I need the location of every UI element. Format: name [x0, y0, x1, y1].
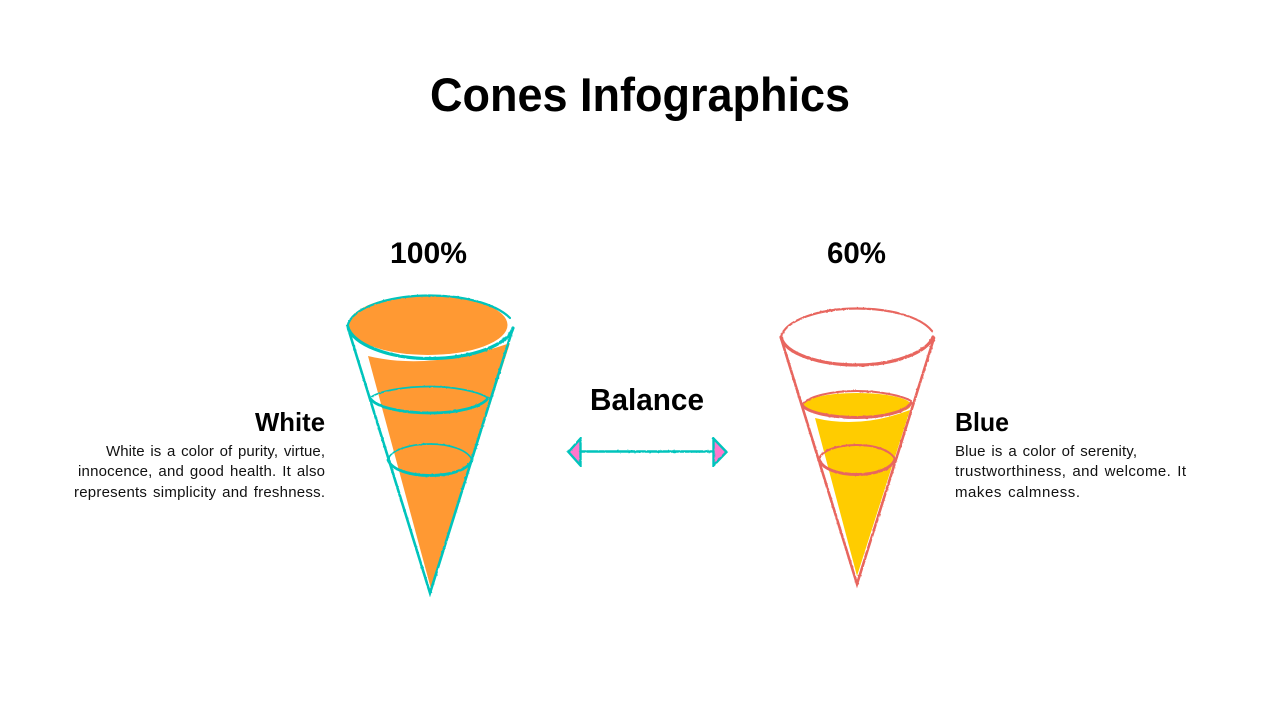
label: Blue: Blue	[955, 407, 1009, 437]
description: White: White is a color of purity, virtue,	[106, 443, 325, 460]
cone fill: yellow top surface	[803, 393, 911, 417]
description: Blue: trustworthiness, and welcome. It	[955, 463, 1187, 480]
cone outline: coral	[781, 308, 934, 584]
panel: blue cone	[781, 237, 1187, 584]
panel: balance arrow	[568, 382, 726, 466]
percentage: 60%: 60%	[827, 237, 886, 270]
description: White: represents simplicity and freshness.	[74, 484, 325, 501]
cone fill: orange top surface	[348, 295, 508, 355]
description: Blue: Blue is a color of serenity,	[955, 443, 1137, 460]
title: Cones Infographics	[430, 68, 850, 121]
heading: Balance: Balance	[590, 382, 704, 417]
description: Blue	[955, 443, 1187, 501]
description: Blue: makes calmness.	[955, 484, 1080, 501]
panel: white cone	[74, 237, 513, 593]
cone fill: orange body	[368, 343, 510, 589]
arrow: double headed	[568, 438, 726, 466]
cone outline: teal	[348, 296, 513, 593]
percentage: 100%: 100%	[390, 237, 467, 270]
description: White: innocence, and good health. It also	[78, 463, 325, 480]
label: White: White	[255, 407, 325, 437]
description: White	[74, 443, 325, 501]
cone fill: yellow body	[815, 410, 910, 576]
